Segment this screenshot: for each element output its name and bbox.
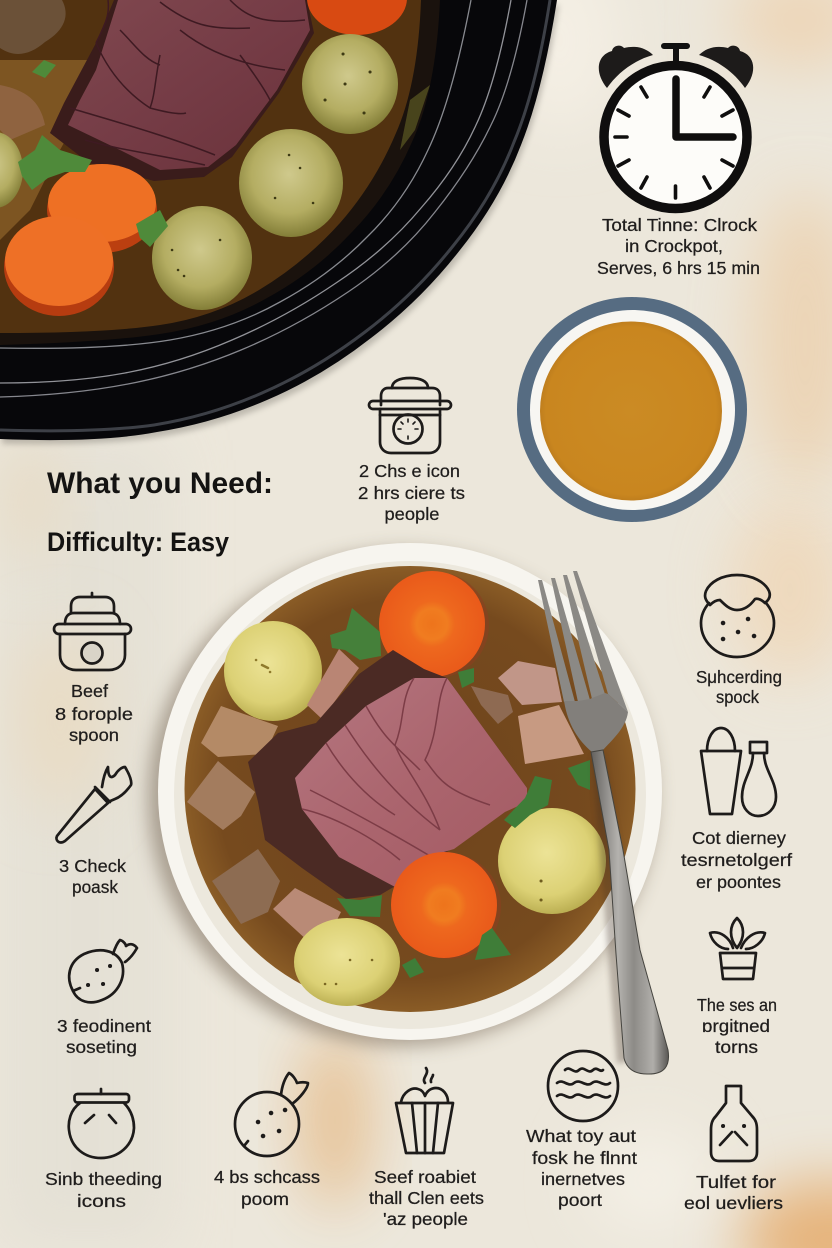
caption: spoon — [69, 725, 119, 745]
inner glaze — [0, 0, 440, 345]
fork — [538, 571, 669, 1074]
heading: what you need: What you Need: — [47, 467, 273, 500]
caption: Cot dierney — [692, 828, 786, 848]
pot shadow — [2, 5, 559, 444]
carrot slice bottom — [391, 852, 501, 959]
icon: carrot — [56, 767, 131, 842]
icon: bottle — [711, 1086, 757, 1161]
caption: soseting — [66, 1037, 137, 1057]
caption: poask — [72, 877, 118, 897]
clock icon — [599, 46, 753, 208]
caption: poort — [558, 1190, 602, 1210]
meat grain — [70, 0, 305, 165]
icon caption line 2: 2 hrs ciere ts — [358, 483, 465, 503]
chunks of beef — [187, 649, 584, 942]
caption: icons — [77, 1191, 126, 1211]
herb — [330, 608, 381, 660]
potato bottom — [294, 918, 400, 1006]
icon: slow cooker — [54, 593, 131, 670]
small bowl of gravy — [517, 297, 747, 522]
main bowl — [148, 543, 669, 1074]
caption: Sinb theeding — [45, 1169, 162, 1189]
potato left — [0, 132, 23, 208]
potato right — [498, 808, 606, 914]
icon: water circle — [548, 1051, 618, 1121]
chunk of beef — [0, 0, 66, 54]
icon: bread face — [701, 575, 774, 657]
caption: 4 bs schcass — [214, 1167, 320, 1187]
icon: plant pot — [710, 918, 765, 979]
icon: pot — [69, 1089, 134, 1158]
roast crust — [248, 650, 527, 899]
caption: ɒrgitned — [702, 1016, 770, 1036]
herbs — [18, 135, 92, 190]
caption: Tulfet for — [696, 1172, 776, 1192]
caption: Beef — [71, 681, 108, 701]
herbs — [337, 668, 590, 978]
roast slice — [50, 0, 314, 181]
carrot — [4, 216, 114, 316]
carrot — [47, 164, 157, 253]
caption: The ses an — [697, 995, 777, 1015]
caption: What toy aut — [526, 1126, 636, 1146]
caption: Seef roabiet — [374, 1167, 476, 1187]
caption: poom — [241, 1189, 289, 1209]
clock caption line 2: in Crockpot, — [625, 236, 723, 256]
carrot slice top — [379, 571, 489, 678]
caption: Sμhcerding — [696, 667, 782, 687]
icon: cupcake — [396, 1068, 453, 1153]
icon caption: 2 Chs e icon — [359, 461, 460, 481]
bowl rim — [158, 543, 662, 1040]
caption: eol uevliers — [684, 1193, 783, 1213]
crockpot with roast and vegetables — [0, 0, 559, 444]
potato — [302, 34, 398, 134]
caption: 3 Check — [59, 856, 126, 876]
icon: potato with sprout — [235, 1073, 308, 1156]
potato — [152, 206, 252, 310]
caption: thall Clen eets — [369, 1188, 484, 1208]
potato right of pot reflection — [400, 85, 430, 150]
caption: 'az people — [383, 1209, 468, 1229]
roast face — [295, 678, 527, 888]
icon caption line 3: people — [384, 504, 440, 524]
icon: potato — [69, 940, 137, 1002]
roast grain — [302, 678, 490, 860]
caption: 8 forople — [55, 704, 133, 724]
caption: spock — [716, 687, 759, 707]
clock caption: Total Tinne: Clrock — [602, 215, 757, 235]
bowl shadow — [148, 550, 656, 1046]
heading: difficulty: Difficulty: Easy — [47, 527, 229, 557]
carrot top — [307, 0, 407, 35]
caption: 3 feodinent — [57, 1016, 151, 1036]
caption: tesrnetolgerf — [681, 850, 792, 870]
potato left — [224, 621, 322, 721]
icon: slow cooker center — [369, 378, 451, 453]
caption: inernetves — [541, 1169, 625, 1189]
caption: fosk he flnnt — [532, 1148, 637, 1168]
stew — [184, 566, 636, 1012]
crockpot rim — [0, 0, 557, 440]
caption: er poontes — [696, 872, 781, 892]
caption: torns — [715, 1037, 758, 1057]
sauce inside the pot — [0, 0, 421, 333]
icon: cup and bottle — [701, 728, 776, 816]
clock caption line 3: Serves, 6 hrs 15 min — [597, 258, 760, 278]
potato — [239, 129, 343, 237]
